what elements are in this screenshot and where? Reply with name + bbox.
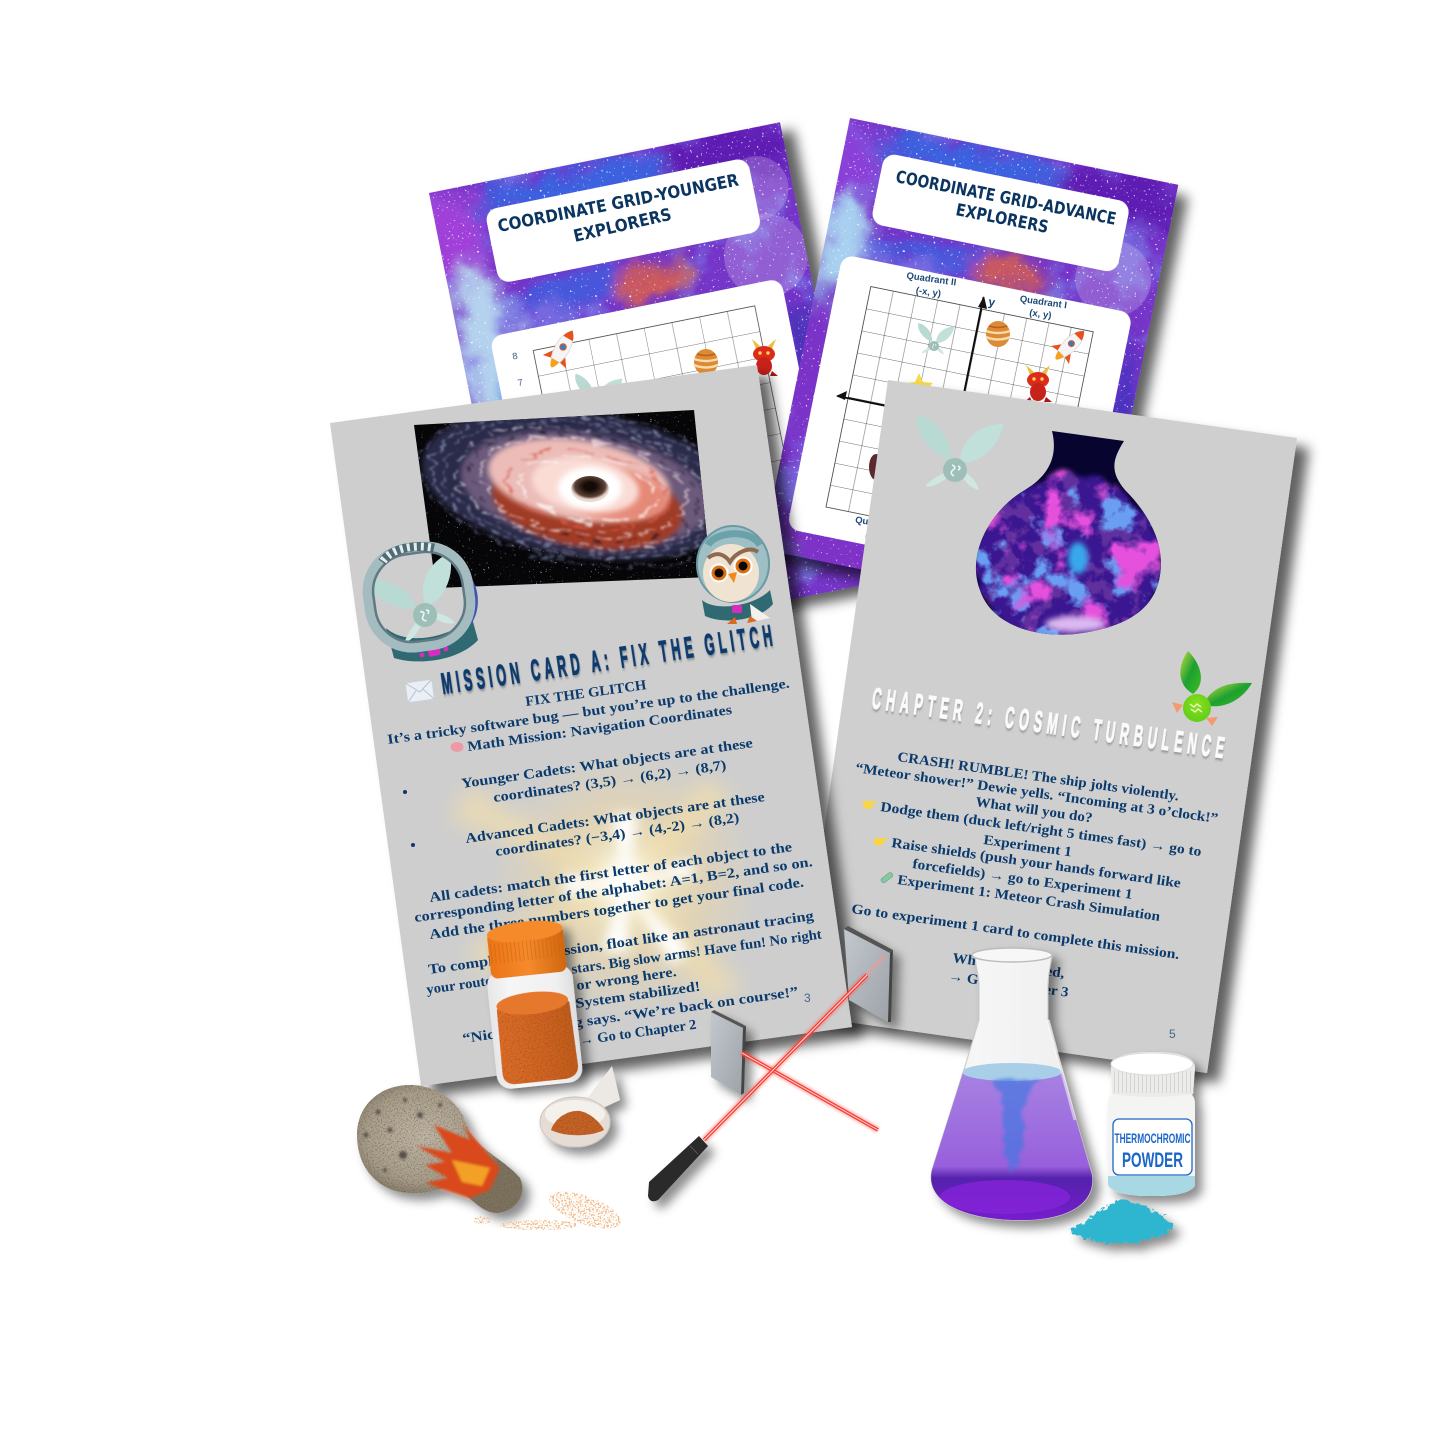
- mission text: Math Mission: Navigation Coordinates: [466, 703, 734, 755]
- owl astronaut: [697, 526, 773, 624]
- green leaf fairy icon: [1172, 651, 1252, 726]
- grid icon: red devil: [1024, 365, 1052, 402]
- title box: [485, 157, 762, 284]
- flame stripes: [417, 1124, 500, 1198]
- beam reflected: [742, 1053, 878, 1130]
- page number 5: 5: [1169, 1027, 1176, 1041]
- icon: brain: [450, 742, 464, 752]
- grid icon: small character: [869, 454, 883, 480]
- nebula background: [429, 122, 855, 596]
- panel: chapter 2 cosmic turbulence card: [798, 380, 1297, 1073]
- mission text: All cadets: match the first letter of each object to the: [428, 840, 793, 906]
- helmet base: [386, 618, 478, 661]
- black hole image: [414, 410, 707, 588]
- orange powder jar: [481, 917, 584, 1090]
- grid icon: red devil: [750, 339, 778, 376]
- label: quadrant III sign: (-: [864, 531, 872, 542]
- y axis arrow: [953, 297, 983, 445]
- mission text: It’s a tricky software bug — but you’re up to the challenge.: [386, 677, 791, 748]
- page number 3: 3: [804, 991, 811, 1005]
- label: quadrant II: Quadrant II: [906, 271, 957, 288]
- meteor model: [357, 1085, 522, 1213]
- helmet ring: [363, 542, 475, 652]
- mission text: coordinates? (3,5) → (6,2) → (8,7): [492, 758, 728, 806]
- bullet: [403, 790, 407, 794]
- laser mirrors and beams: [648, 926, 893, 1201]
- astronaut helmet with fairy: [363, 542, 478, 661]
- laser pointer body: [648, 1136, 708, 1201]
- grid panel: [787, 254, 1133, 588]
- story text: CRASH! RUMBLE! The ship jolts violently.: [896, 750, 1180, 804]
- mission text: [386, 677, 823, 1049]
- mission text: corresponding letter of the alphabet: A=1, B=2, and so on.: [413, 855, 814, 926]
- thermochromic powder bottle: [1108, 1052, 1195, 1196]
- golden light burst: [450, 750, 760, 1020]
- label: quadrant I: Quadrant I: [1019, 294, 1068, 311]
- mirror right: [844, 926, 893, 1022]
- mission text: “Nice work,” Zig says. “We’re back on course!”: [461, 985, 799, 1047]
- vase of cosmic cloud: [976, 431, 1161, 635]
- mission text: To complete this mission, float like an astronaut tracing: [427, 909, 815, 978]
- heading: coordinate grid younger line 1: COORDINATE GRID-YOUNGER: [496, 171, 740, 237]
- panel: coordinate grid advance explorers card: [774, 118, 1196, 586]
- mission text: Add the three numbers together to get your final code.: [428, 875, 805, 943]
- bullet: [411, 843, 415, 847]
- story text: “Meteor shower!” Dewie yells. “Incoming at 3 o’clock!”: [854, 761, 1219, 827]
- story text: Raise shields (push your hands forward like: [890, 836, 1182, 892]
- mirror left: [711, 1010, 746, 1095]
- label text thermochromic: THERMOCHROMIC: [1114, 1130, 1190, 1146]
- orange dust scatter: [473, 1184, 625, 1236]
- blue swirl: [995, 1078, 1040, 1172]
- blue powder pile: [1068, 1199, 1174, 1244]
- story text: Go to experiment 1 card to complete this mission.: [850, 902, 1180, 963]
- axis label 8: 8: [511, 351, 519, 363]
- grid icon: planet: [986, 321, 1010, 347]
- story text: [850, 750, 1219, 1001]
- nebula background: [775, 118, 1178, 569]
- mission text: → Go to Chapter 2: [578, 1018, 697, 1049]
- story text: Dodge them (duck left/right 5 times fast) → go to: [879, 800, 1202, 860]
- spoon with powder: [540, 1066, 620, 1147]
- panel: mission card A fix the glitch: [330, 365, 852, 1086]
- orange cap: [487, 924, 567, 979]
- panel: coordinate grid younger explorers card: [429, 122, 862, 616]
- label: quadrant I sign: (x, y): [1029, 308, 1052, 322]
- story text: When completed,: [951, 951, 1065, 982]
- mission title: MISSION CARD A: FIX THE GLITCH: [439, 618, 774, 700]
- icon: envelope: [405, 679, 435, 703]
- powder fill: [495, 990, 579, 1085]
- story text: What will you do?: [974, 795, 1093, 826]
- grid icon: star: [905, 373, 933, 390]
- bottle label: [1113, 1119, 1192, 1175]
- axis label 7: 7: [517, 377, 524, 389]
- story text: forcefields) → go to Experiment 1: [911, 857, 1133, 903]
- grid icon: rocket: [540, 324, 584, 374]
- mission text: or wrong here.: [575, 965, 678, 994]
- chapter title: CHAPTER 2: COSMIC TURBULENCE: [870, 681, 1227, 765]
- story text: Experiment 1: [982, 833, 1073, 860]
- white core rays: [565, 815, 695, 965]
- grid icon: rocket: [1043, 317, 1096, 373]
- Erlenmeyer flask with purple liquid: [925, 948, 1100, 1224]
- jar body: [486, 964, 584, 1090]
- axis label y: y: [987, 295, 997, 310]
- fairy inside helmet: [367, 545, 477, 649]
- label text powder: POWDER: [1122, 1149, 1183, 1172]
- story text: → Go to Chapter 3: [947, 969, 1069, 1001]
- label: quadrant III: Qua: [854, 515, 875, 528]
- mission text: FIX THE GLITCH: [524, 678, 647, 710]
- icon: pointing hand: [863, 801, 878, 809]
- title box: [870, 153, 1131, 273]
- arrowheads on axes: [836, 296, 987, 400]
- mission text: System stabilized!: [574, 980, 701, 1012]
- grid icon: fairy wings: [575, 374, 622, 415]
- x axis arrow: [837, 396, 913, 411]
- grid icon: planet: [694, 349, 718, 375]
- beam from pointer: [704, 955, 885, 1140]
- icon: test tube: [880, 872, 894, 884]
- grid panel: [490, 278, 833, 597]
- label: quadrant II sign: (-x, y): [915, 285, 942, 300]
- heading: coordinate grid advance line 2: EXPLORERS: [954, 200, 1050, 238]
- mission text: coordinates? (−3,4) → (4,-2) → (8,2): [494, 811, 741, 860]
- heading: coordinate grid advance line 1: COORDINATE GRID-ADVANCE: [894, 167, 1118, 230]
- fairy icon: [917, 415, 1003, 490]
- yellow diagonal rays: [450, 775, 745, 1005]
- mission text: your route through the stars. Big slow arms! Have fun! No right: [425, 928, 823, 998]
- icon: pointing hand: [874, 838, 889, 846]
- heading: coordinate grid younger line 2: EXPLORERS: [572, 205, 674, 247]
- mission text: Younger Cadets: What objects are at these: [460, 736, 754, 792]
- mission text: Advanced Cadets: What objects are at these: [464, 790, 766, 847]
- story text: Experiment 1: Meteor Crash Simulation: [896, 873, 1161, 925]
- grid icon: fairy: [918, 323, 954, 354]
